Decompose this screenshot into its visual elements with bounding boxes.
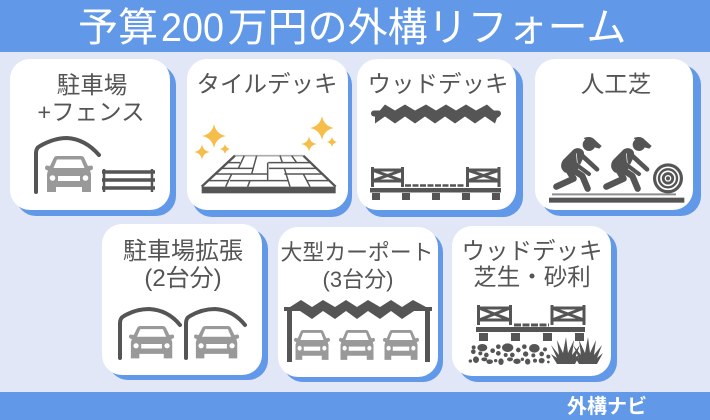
icon: car 1 bbox=[294, 330, 330, 360]
heading: タイルデッキ: タイルデッキ bbox=[196, 71, 338, 97]
heading: 駐車場+フェンス bbox=[37, 72, 145, 125]
turf strip bbox=[552, 191, 676, 197]
icon: wooden deck bbox=[476, 305, 585, 341]
heading: 駐車場拡張 (2台分): (2台分) bbox=[144, 265, 222, 292]
icon: carport arcs bbox=[120, 309, 245, 358]
icon: car 1 bbox=[129, 326, 174, 358]
title: 万円の外構リフォーム bbox=[228, 6, 626, 50]
icon: fence bbox=[102, 169, 155, 192]
panel: ウッドデッキ bbox=[357, 59, 523, 217]
heading: 駐車場拡張 (2台分): 駐車場拡張 bbox=[123, 238, 243, 265]
heading: 駐車場拡張 (2台分) bbox=[123, 238, 243, 292]
title: 予算 bbox=[78, 6, 158, 50]
worker 1 bbox=[556, 137, 602, 189]
icon: car 3 bbox=[383, 330, 419, 360]
header band with title bbox=[0, 0, 710, 52]
icon: workers rolling turf bbox=[549, 137, 684, 203]
title: 200 bbox=[161, 6, 224, 50]
icon: sparkles bbox=[194, 116, 337, 160]
footer band with brand bbox=[0, 392, 710, 420]
icon: grass tuft left bbox=[551, 337, 581, 364]
icon: tile floor bbox=[202, 156, 336, 193]
icon: wooden deck bbox=[370, 167, 501, 200]
panel: 人工芝 bbox=[535, 59, 701, 216]
heading: 大型カーポート (3台分) bbox=[280, 240, 434, 292]
icon: deck roof bbox=[371, 104, 501, 124]
icon: car bbox=[45, 156, 93, 192]
panel: 駐車場拡張 bbox=[102, 224, 268, 380]
heading: 駐車場+フェンス: 駐車場 bbox=[57, 72, 127, 98]
icon: car 2 bbox=[339, 330, 375, 360]
icon: gravel bbox=[469, 344, 550, 365]
heading: ウッドデッキ 芝生・砂利 bbox=[462, 238, 602, 290]
heading: ウッドデッキ 芝生・砂利: 芝生・砂利 bbox=[473, 264, 591, 290]
brand: 外構ナビ: 外構ナビ bbox=[567, 395, 647, 418]
turf roll bbox=[653, 163, 683, 193]
panel: 駐車場+フェンス bbox=[10, 59, 176, 216]
heading: 駐車場+フェンス: +フェンス bbox=[37, 99, 145, 125]
panel: タイルデッキ bbox=[187, 59, 352, 217]
worker 2 bbox=[606, 137, 652, 189]
heading: ウッドデッキ: ウッドデッキ bbox=[368, 71, 508, 97]
heading: 大型カーポート (3台分): (3台分) bbox=[323, 267, 393, 292]
icon: grass tuft right bbox=[573, 337, 603, 364]
heading: ウッドデッキ 芝生・砂利: ウッドデッキ bbox=[462, 238, 602, 264]
icon: car 2 bbox=[194, 326, 239, 358]
ground bbox=[549, 198, 684, 203]
heading: 大型カーポート (3台分): 大型カーポート bbox=[280, 240, 434, 265]
panel: ウッドデッキ 芝生・砂利 bbox=[452, 226, 617, 382]
icon: carport arc bbox=[36, 138, 99, 192]
panel: 大型カーポート bbox=[278, 227, 443, 382]
icon: large carport roof and pillars bbox=[284, 300, 432, 362]
heading: 人工芝: 人工芝 bbox=[581, 71, 651, 97]
